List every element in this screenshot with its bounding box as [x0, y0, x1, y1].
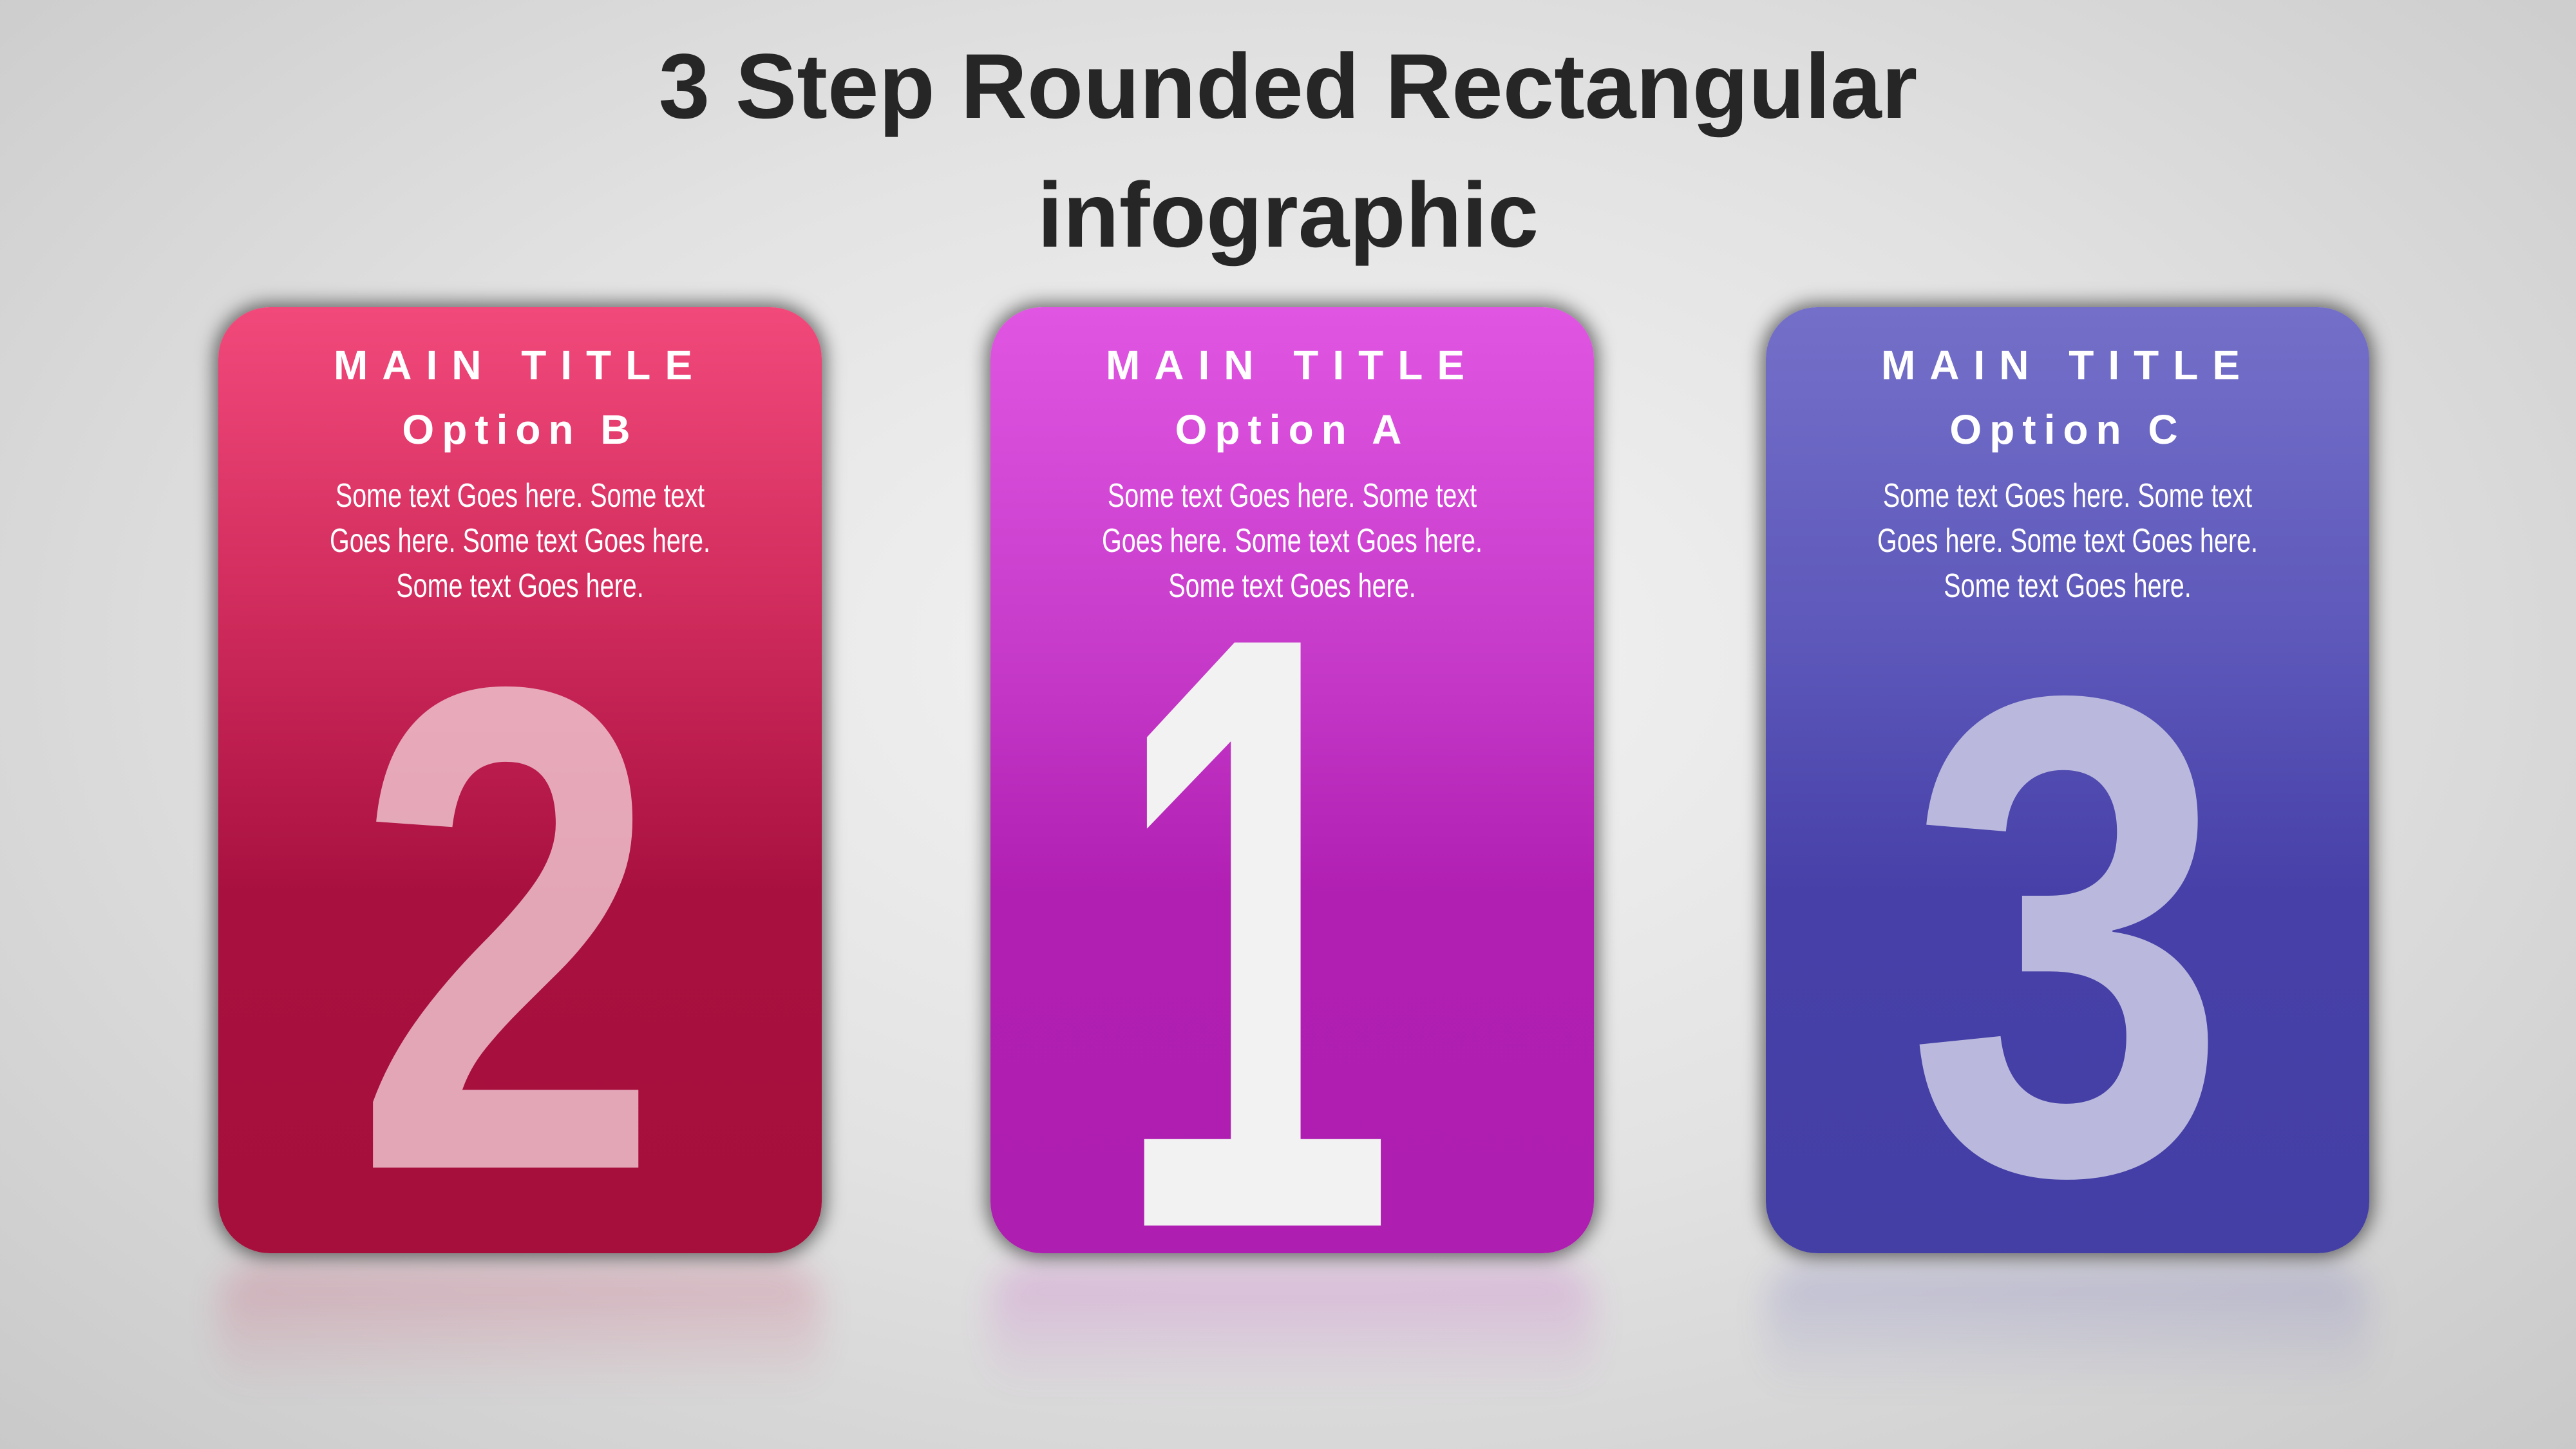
- heading: main title C: MAIN TITLE: [1881, 342, 2254, 388]
- subheading: option C: Option C: [1949, 406, 2186, 453]
- title: infographic: [1037, 164, 1539, 267]
- subheading: option A: Option A: [1175, 406, 1409, 453]
- text block B: Goes here. Some text Goes here.: [330, 522, 710, 560]
- title: 3 Step Rounded Rectangular: [659, 35, 1917, 138]
- text block B: Some text Goes here. Some text: [336, 477, 705, 515]
- reflection: card C: [1766, 1265, 2369, 1394]
- text block B: Some text Goes here.: [396, 567, 644, 605]
- text block A: Some text Goes here. Some text: [1108, 477, 1477, 515]
- text block C: [1877, 477, 2258, 605]
- text block A: [1102, 477, 1482, 605]
- reflection: card A: [990, 1265, 1594, 1394]
- text block A: Goes here. Some text Goes here.: [1102, 522, 1482, 560]
- reflection: card B: [218, 1265, 822, 1394]
- panel: option A: [990, 307, 1594, 1253]
- heading: main title B: MAIN TITLE: [334, 342, 706, 388]
- subheading: option B: Option B: [402, 406, 638, 453]
- text block C: Some text Goes here. Some text: [1883, 477, 2252, 515]
- text block B: [330, 477, 710, 605]
- text block C: Some text Goes here.: [1944, 567, 2192, 605]
- text block A: Some text Goes here.: [1168, 567, 1416, 605]
- heading: main title A: MAIN TITLE: [1106, 342, 1479, 388]
- title: [659, 35, 1917, 267]
- text block C: Goes here. Some text Goes here.: [1877, 522, 2258, 560]
- panel: option B: [218, 307, 822, 1253]
- panel: option C: [1766, 307, 2369, 1253]
